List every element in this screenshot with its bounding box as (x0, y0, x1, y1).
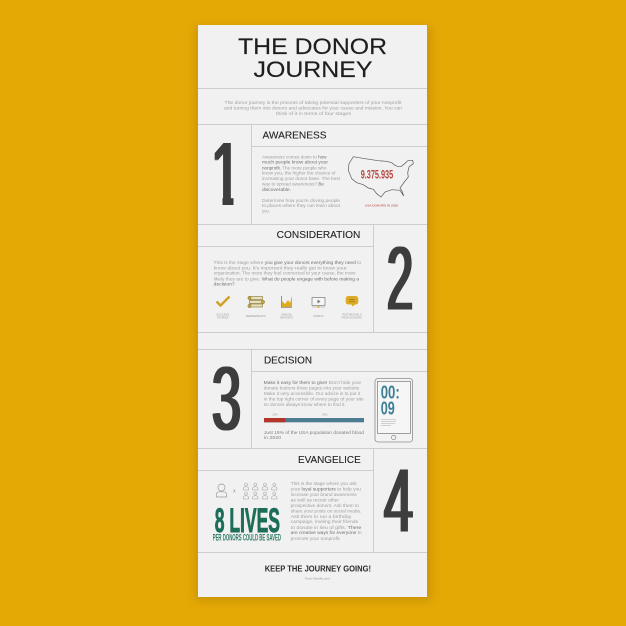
icon: group of people (243, 483, 277, 499)
footer source: Font: Kinefic.com (305, 576, 331, 580)
arrow (234, 490, 235, 492)
icon: memberships list (248, 296, 264, 308)
panel: awareness (214, 132, 414, 214)
panel: evangelice (213, 452, 413, 552)
consideration body text: know about you. It's important they really get to know your (214, 265, 347, 271)
awareness body text: to places where they can learn about (262, 203, 341, 209)
icon: video screen (312, 298, 325, 308)
decision body text: Make it very accessible. Our advice is to put it (264, 391, 361, 397)
intro text (224, 100, 402, 117)
stacked bar with percentages: 15% (272, 412, 278, 416)
stacked bar with percentages (264, 412, 364, 422)
card shadow (195, 27, 431, 601)
decision body text (264, 380, 364, 408)
stage number 3: 3 (212, 350, 241, 450)
decision body text: Make it easy for them to give! Don't hide your (264, 380, 362, 386)
consideration body text: organization. The more they feel connected to your cause, the more (214, 271, 356, 277)
consideration body text (214, 260, 362, 288)
bar caption (264, 430, 364, 441)
heading: consideration: CONSIDERATION (277, 230, 360, 241)
bar caption: Just 15% of the USA population donated blood (264, 430, 364, 436)
icon labels: STORIES (217, 315, 229, 319)
title: JOURNEY (254, 57, 372, 82)
map caption: USA DONORS IN 2020 (365, 204, 398, 208)
icon: phone with timer: 09 (381, 398, 395, 418)
evangelice body text: to donate in lieu of gifts. There (291, 525, 362, 531)
stage number 2: 2 (387, 230, 413, 330)
intro text: think of it in terms of four stages (276, 111, 352, 117)
decision body text: so donors always know where to find it. (264, 402, 346, 408)
donor count: 9.375.935 (361, 169, 394, 181)
icon labels: ANNUAL (281, 312, 293, 316)
icon: single person (216, 484, 227, 497)
icon: phone with timer (375, 378, 412, 442)
footer call to action: KEEP THE JOURNEY GOING! (265, 564, 371, 573)
awareness body text: Awareness comes down to how (262, 154, 327, 160)
heading: decision: DECISION (264, 355, 312, 366)
icon labels: VIDEOS (313, 314, 324, 318)
icon: check mark (216, 296, 230, 306)
awareness body text: way to spread awareness? Be (262, 181, 324, 187)
timer digits: 00: (381, 382, 400, 402)
awareness body text: know you, the higher the chance of (262, 171, 336, 177)
awareness body text: increasing your donor base. The best (262, 176, 341, 182)
stacked bar with percentages: 85% (322, 412, 328, 416)
consideration body text: likely they are to give. What do people engage with before making a (214, 276, 359, 282)
stage number 1: 1 (211, 125, 241, 225)
icon labels: TESTIMONIALS (342, 312, 362, 316)
evangelice body text: increase your brand awareness (291, 492, 357, 498)
icon labels: FROM DONORS (341, 315, 362, 319)
white card (198, 25, 427, 597)
evangelice body text: Ask them to run a birthday (291, 514, 352, 520)
evangelice body text: share your posts on social media. (291, 508, 361, 514)
evangelice body text: promote your nonprofit. (291, 536, 341, 542)
evangelice body text: prospective donors. Ask them to (291, 503, 359, 509)
phone small text (381, 420, 396, 426)
decision body text: in the top right corner of every page of your site (264, 396, 364, 402)
heading: awareness: AWARENESS (262, 130, 327, 142)
panel: evangelice: PER DONORS COULD BE SAVED (213, 532, 281, 542)
statistic: 8 lives: 8 LIVES (215, 502, 280, 540)
evangelice body text: as well as recruit other (291, 498, 339, 504)
consideration body text: This is the stage where you give your donors everything they need to (214, 260, 362, 266)
awareness body text: much people know about your (262, 160, 328, 166)
title: THE DONOR (238, 34, 387, 59)
awareness body text: you. (262, 210, 270, 215)
awareness body text: Determine how you're driving people (262, 198, 340, 204)
panel: consideration (214, 230, 413, 330)
icon labels: REPORTS (280, 315, 293, 319)
awareness body text: nonprofit. The more people who (262, 165, 327, 171)
decision body text: donate buttons three pages into your website. (264, 386, 361, 392)
awareness body text (262, 154, 341, 215)
panel: decision (212, 350, 412, 450)
evangelice body text: campaign, inviting their friends (291, 519, 359, 525)
evangelice body text: This is the stage where you ask (291, 481, 357, 487)
stage number 4: 4 (384, 452, 413, 552)
awareness body text: discoverable. (262, 187, 291, 193)
title (238, 34, 387, 82)
icon labels: SUCCESS (216, 312, 229, 316)
intro text: The donor journey is the process of taking potential supporters of your nonprofit (224, 100, 402, 106)
icon: speech bubble (346, 296, 358, 306)
evangelice body text (291, 481, 362, 542)
icon labels (216, 312, 362, 319)
consideration body text: decision? (214, 282, 235, 288)
icon labels: MEMBERSHIPS (246, 314, 266, 318)
bar caption: in 2020 (264, 435, 281, 441)
heading: evangelice: EVANGELICE (298, 455, 361, 466)
infographic canvas (192, 24, 434, 604)
evangelice body text: your loyal supporters to help you (291, 486, 361, 492)
icon: annual reports chart (282, 296, 292, 308)
intro text: and turning them into donors and advocates for your cause and mission. You can (224, 105, 402, 111)
evangelice body text: are creative ways for everyone to (291, 530, 362, 536)
usa map with donor count (348, 157, 413, 208)
